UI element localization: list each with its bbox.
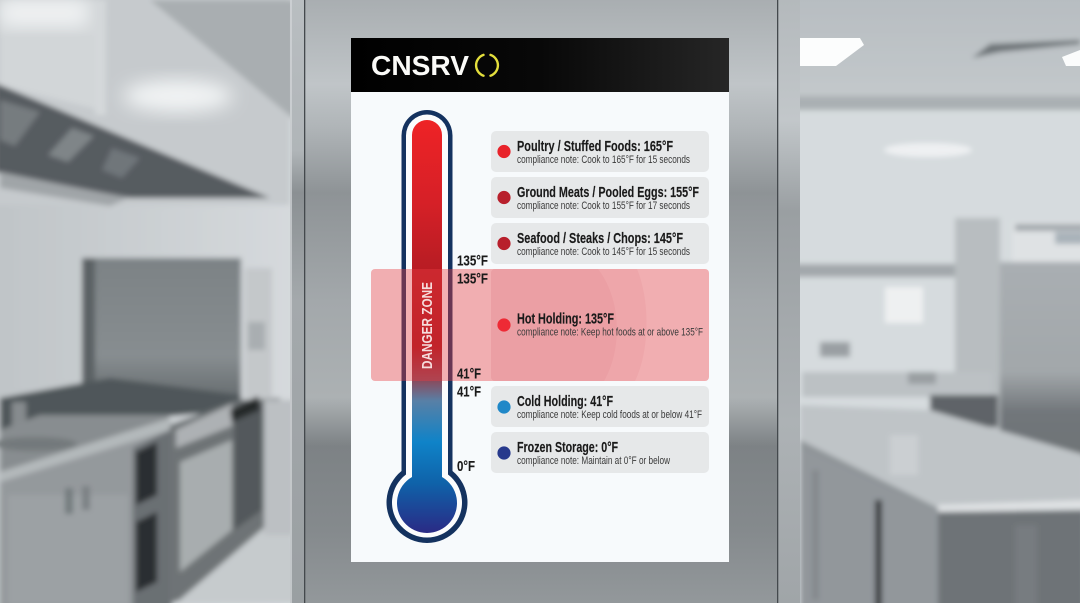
card: frozen storage: compliance note: Maintain at 0°F or below — [517, 455, 670, 467]
background: blurred kitchen right — [790, 0, 1080, 603]
temperature scale labels: 0°F — [457, 458, 475, 475]
card: cold holding: Cold Holding: 41°F — [517, 393, 613, 410]
card: hot holding: Hot Holding: 135°F — [517, 310, 614, 328]
card: seafood: Seafood / Steaks / Chops: 145°F — [517, 230, 683, 247]
card: cold holding: compliance note: Keep cold foods at or below 41°F — [517, 409, 702, 421]
card: frozen storage: Frozen Storage: 0°F — [517, 439, 618, 456]
danger zone label: DANGER ZONE — [419, 282, 436, 369]
ceiling light small — [1062, 50, 1080, 66]
card: ground meats: compliance note: Cook to 155°F for 17 seconds — [517, 200, 690, 212]
poster header band — [351, 38, 729, 92]
card: poultry: compliance note: Cook to 165°F for 15 seconds — [517, 154, 690, 166]
background: blurred kitchen left — [0, 0, 300, 603]
card: cold holding — [491, 386, 709, 427]
temperature scale labels — [457, 252, 488, 475]
card: hot holding: compliance note: Keep hot foods at or above 135°F — [517, 326, 703, 338]
card: ground meats — [491, 177, 709, 218]
card: seafood: compliance note: Cook to 145°F for 15 seconds — [517, 246, 690, 258]
brand logo: CNSRV — [371, 50, 470, 81]
card: poultry: Poultry / Stuffed Foods: 165°F — [517, 138, 673, 155]
ceiling light panel — [800, 38, 864, 66]
temperature scale labels: 41°F — [457, 384, 481, 400]
card: poultry — [491, 131, 709, 172]
card: hot holding — [497, 310, 703, 338]
temperature scale labels: 135°F — [457, 252, 488, 270]
card: seafood — [491, 223, 709, 264]
temperature scale labels: 41°F — [457, 366, 481, 382]
hot holding card shade — [491, 269, 647, 381]
danger zone band — [371, 269, 709, 381]
card: frozen storage — [491, 432, 709, 473]
thermometer — [386, 110, 467, 543]
card: ground meats: Ground Meats / Pooled Eggs: 155°F — [517, 184, 699, 201]
stainless steel door panel — [290, 0, 800, 603]
temperature scale labels: 135°F — [457, 270, 488, 288]
poster panel — [351, 38, 729, 562]
